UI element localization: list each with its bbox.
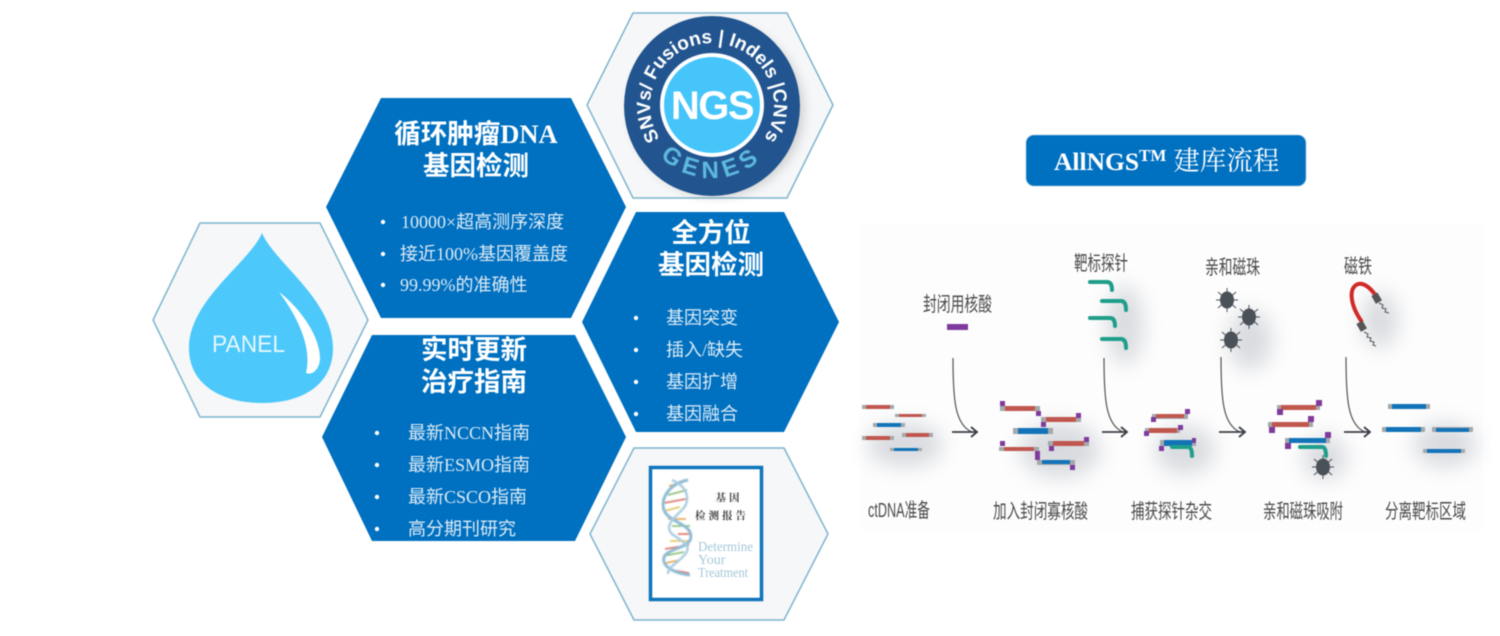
panel: NGS hexagon [586, 12, 834, 201]
bullet list: 接近100%基因覆盖度 [400, 244, 568, 264]
bullet list [375, 423, 530, 539]
bullet list: 基因扩增 [666, 372, 738, 392]
heading: AllNGS library workflow: 建库流程 [1173, 139, 1279, 178]
heading: 基因检测 [423, 151, 529, 181]
step captions: 捕获探针杂交 [1131, 500, 1212, 523]
heading: 循环肿瘤DNA [394, 119, 558, 149]
heading: AllNGS library workflow: AllNGS [1054, 147, 1139, 176]
bullet list [634, 308, 743, 424]
icon: probes [1090, 282, 1126, 348]
bullet list: 最新ESMO指南 [408, 455, 530, 475]
panel: circulating tumour DNA [326, 98, 626, 318]
ring text: GENES: GENES [663, 146, 757, 179]
report cover frame [650, 468, 762, 600]
NGS badge ring [624, 16, 800, 196]
report title: 检测报告 [695, 508, 749, 523]
heading: AllNGS library workflow [1026, 135, 1306, 186]
bullet list: 插入/缺失 [666, 340, 743, 360]
heading: 治疗指南 [421, 367, 527, 397]
NGS badge centre [662, 55, 762, 155]
step captions: ctDNA准备 [868, 499, 930, 522]
label: affinity beads: 亲和磁珠 [1205, 256, 1260, 279]
NGS label: NGS [671, 84, 754, 128]
heading: 基因检测 [658, 250, 764, 280]
icon: magnet [1352, 284, 1389, 346]
step 1: ctDNA fragments [862, 405, 933, 451]
icon: DNA helix [663, 480, 691, 575]
bullet list: 10000×超高测序深度 [401, 212, 564, 232]
heading: 全方位 [671, 218, 751, 248]
step captions [868, 499, 1466, 523]
panel: real-time guidelines [322, 335, 626, 541]
panel: full-range gene testing [582, 212, 839, 432]
report slogan: Treatment [698, 566, 748, 581]
bullet list: 最新NCCN指南 [408, 423, 530, 443]
report slogan: Your [698, 553, 726, 568]
circle shadow [630, 23, 804, 197]
bullet list [381, 212, 568, 295]
label: magnet: 磁铁 [1344, 255, 1372, 278]
bullet list: 99.99%的准确性 [400, 275, 528, 295]
icon: drop highlight [279, 292, 320, 374]
heading: AllNGS library workflow: TM [1139, 146, 1166, 165]
icon: beads [1216, 288, 1260, 352]
heading: 实时更新 [421, 335, 527, 365]
panel: library workflow diagram [860, 225, 1483, 530]
icon: blocking oligo [947, 324, 968, 330]
step 4: bead capture [1268, 400, 1334, 479]
step 3: probe hybridisation [1144, 409, 1196, 456]
ring text: variant types: SNVs/ Fusions | Indels |CNVs [636, 29, 788, 144]
arrows: reagent addition [952, 357, 1370, 437]
label: blocking oligos: 封闭用核酸 [923, 293, 992, 316]
report title: 基因 [716, 490, 742, 505]
step captions: 加入封闭寡核酸 [993, 500, 1088, 523]
panel: PANEL drop hexagon [153, 223, 368, 417]
icon: water drop [189, 233, 333, 403]
report slogan: Determine [698, 540, 753, 555]
bullet list: 高分期刊研究 [408, 519, 516, 539]
panel: report hexagon [590, 448, 828, 620]
step 5: separated targets [1382, 404, 1473, 453]
bullet list: 基因融合 [666, 404, 738, 424]
soft shadows [867, 285, 1477, 480]
step captions: 亲和磁珠吸附 [1263, 500, 1343, 523]
bullet list: 最新CSCO指南 [408, 487, 527, 507]
bullet list: 基因突变 [666, 308, 738, 328]
PANEL label: PANEL [212, 331, 285, 358]
label: target probes: 靶标探针 [1074, 252, 1128, 275]
step 2: blocked fragments [999, 401, 1089, 470]
